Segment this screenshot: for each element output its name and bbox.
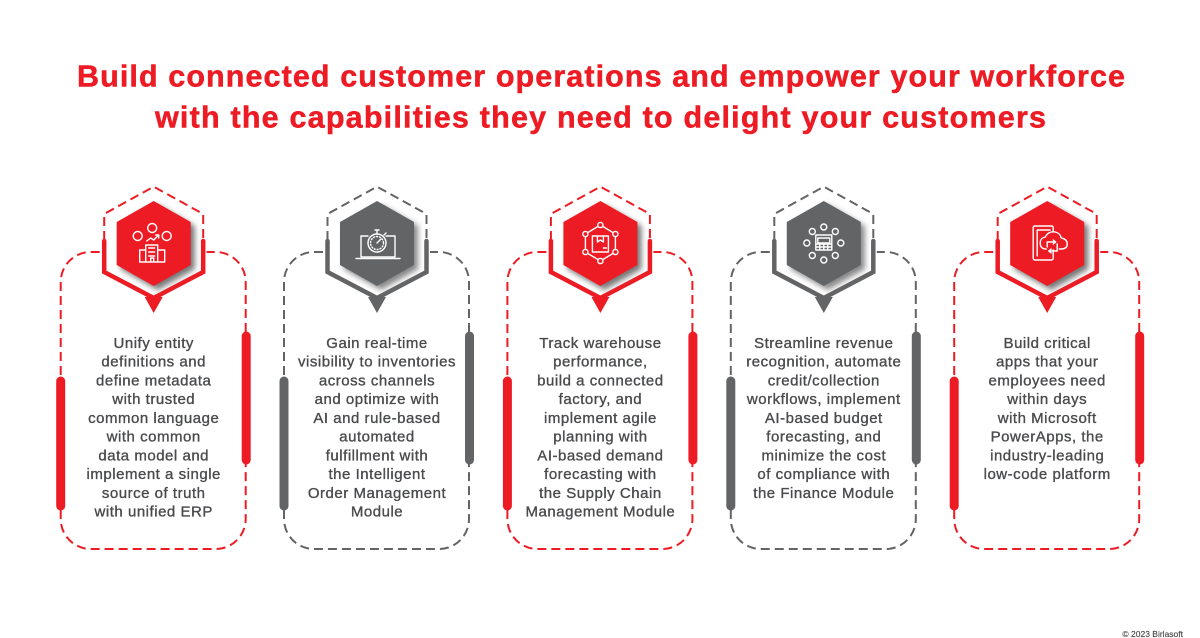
- description text: build a connected: [537, 372, 664, 390]
- description text: across channels: [319, 372, 435, 390]
- description text: with trusted: [111, 391, 195, 408]
- hexagon frame and pointer: [774, 187, 873, 313]
- side accent bars: [954, 336, 1140, 506]
- description text: low-code platform: [984, 466, 1111, 483]
- title: Build connected customer operations and empower your workforce: [77, 60, 1125, 94]
- icon: calculator with orbiting nodes: [804, 224, 844, 263]
- description text: apps that your: [996, 354, 1098, 371]
- hexagon: [117, 201, 191, 286]
- hexagon shadow: [567, 205, 641, 290]
- description text: [526, 335, 675, 521]
- side accent bars: [284, 336, 470, 506]
- description text: Track warehouse: [539, 335, 662, 352]
- description text: planning with: [553, 429, 648, 446]
- description text: Module: [351, 504, 403, 521]
- icon: building with finance symbols: [133, 224, 171, 262]
- hexagon: [1010, 201, 1084, 286]
- description text: common language: [88, 410, 219, 427]
- description text: recognition, automate: [746, 354, 901, 371]
- hexagon: [340, 201, 414, 286]
- dashed card outline: [507, 252, 692, 549]
- title: with the capabilities they need to delight your customers: [154, 100, 1046, 134]
- description text: Build critical: [1004, 335, 1091, 352]
- description text: [86, 335, 221, 521]
- panel: unified ERP card: [61, 187, 246, 549]
- panel: finance module card: [731, 187, 916, 549]
- description text: employees need: [989, 372, 1106, 390]
- description text: definitions and: [101, 354, 206, 371]
- panel: supply chain management card: [507, 187, 693, 549]
- description text: visibility to inventories: [298, 354, 456, 371]
- description text: credit/collection: [768, 372, 880, 390]
- hexagon shadow: [121, 205, 195, 290]
- dashed card outline: [954, 252, 1139, 549]
- dashed card outline: [284, 252, 469, 549]
- description text: with unified ERP: [94, 504, 213, 521]
- icon: tablet with cloud sync: [1033, 226, 1067, 260]
- description text: source of truth: [102, 485, 206, 502]
- hexagon frame and pointer: [104, 187, 203, 313]
- description text: automated: [339, 429, 415, 446]
- description text: industry-leading: [990, 448, 1104, 464]
- description text: within days: [1006, 391, 1087, 408]
- hexagon: [563, 201, 637, 286]
- panel: PowerApps card: [954, 187, 1140, 549]
- description text: the Intelligent: [328, 466, 426, 483]
- hexagon frame and pointer: [998, 187, 1097, 313]
- description text: Gain real-time: [326, 335, 428, 352]
- hexagon shadow: [344, 205, 418, 290]
- description text: Unify entity: [113, 335, 194, 352]
- hexagon shadow: [1014, 205, 1088, 290]
- dashed card outline: [61, 252, 246, 549]
- description text: [746, 335, 901, 502]
- icon: laptop with stopwatch: [356, 230, 400, 258]
- description text: the Supply Chain: [539, 485, 662, 502]
- description text: AI-based demand: [537, 448, 664, 464]
- description text: of compliance with: [757, 466, 890, 483]
- side accent bars: [507, 336, 693, 506]
- description text: AI and rule-based: [313, 410, 441, 427]
- description text: minimize the cost: [761, 448, 886, 464]
- description text: define metadata: [96, 372, 212, 390]
- description text: implement agile: [544, 410, 657, 427]
- hexagon shadow: [791, 205, 865, 290]
- description text: workflows, implement: [746, 391, 901, 408]
- description text: the Finance Module: [753, 485, 894, 502]
- hexagon frame and pointer: [328, 187, 426, 313]
- description text: [298, 335, 456, 521]
- icon: connected package network: [583, 222, 618, 264]
- description text: fulfillment with: [326, 448, 428, 464]
- description text: Management Module: [526, 504, 675, 521]
- description text: Order Management: [308, 485, 447, 502]
- description text: implement a single: [86, 466, 221, 483]
- description text: performance,: [553, 354, 648, 371]
- hexagon: [787, 201, 861, 286]
- description text: factory, and: [559, 391, 642, 408]
- description text: data model and: [98, 448, 209, 464]
- panel: intelligent order management card: [284, 187, 470, 549]
- hexagon frame and pointer: [551, 187, 650, 313]
- description text: and optimize with: [315, 391, 439, 408]
- title: [77, 60, 1125, 134]
- description text: forecasting, and: [766, 429, 881, 446]
- description text: [984, 335, 1111, 483]
- dashed card outline: [731, 252, 916, 549]
- description text: forecasting with: [544, 466, 657, 483]
- description text: AI-based budget: [765, 410, 883, 427]
- description text: with common: [106, 429, 201, 446]
- description text: with Microsoft: [997, 410, 1097, 427]
- side accent bars: [61, 336, 246, 506]
- description text: PowerApps, the: [991, 429, 1104, 446]
- side accent bars: [731, 336, 916, 506]
- description text: Streamline revenue: [754, 335, 894, 352]
